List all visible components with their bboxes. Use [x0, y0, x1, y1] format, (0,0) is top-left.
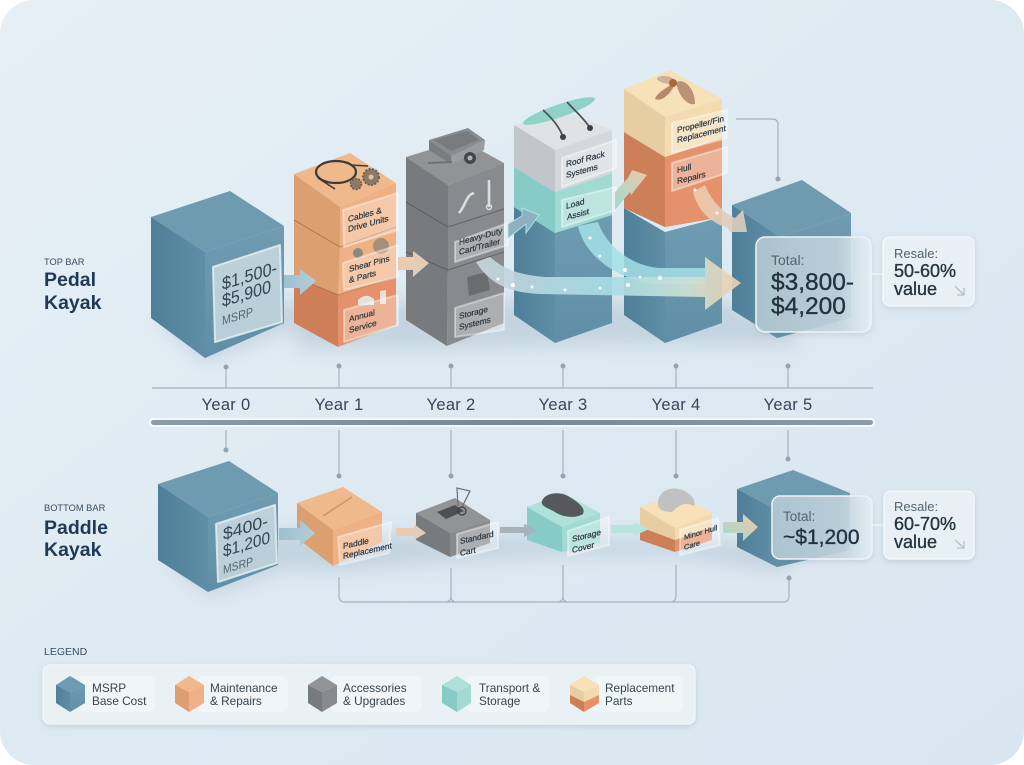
- legend item: maintenance and repairs: Maintenance: [210, 681, 278, 695]
- Year 1 pedal: maintenance stack: Shear Pins: [349, 253, 390, 274]
- legend item: accessories and upgrades: [308, 676, 422, 712]
- floor shadows: [155, 300, 810, 596]
- legend item: transport and storage: Transport &: [479, 681, 540, 695]
- row label: bottom bar Paddle Kayak: Kayak: [44, 539, 102, 561]
- callout: pedal total: $3,800-: [771, 269, 854, 296]
- Year 4 paddle: hull care cube: [640, 489, 720, 555]
- Year 1 paddle: replacement cube: Paddle: [343, 535, 369, 551]
- callout: pedal resale: [883, 237, 974, 306]
- Year 0 paddle: MSRP cube: $1,200: [223, 527, 270, 561]
- Year 4 pedal: replacement parts stack: Replacement: [677, 123, 726, 145]
- callout: paddle total: Total:: [783, 509, 815, 524]
- arrow: paddle year 3 to year 4: [611, 522, 649, 536]
- Year 3 paddle: storage cover cube: [527, 493, 609, 556]
- timeline axis: Year 2: [427, 396, 475, 414]
- Year 1 pedal: maintenance stack: Cables &: [348, 205, 382, 224]
- legend item: replacement parts: [570, 676, 683, 712]
- Year 0 paddle: MSRP cube: $400-: [223, 511, 268, 544]
- arrow: year 3 to year 4: [615, 170, 647, 210]
- callout: pedal total: [756, 237, 871, 332]
- callout: pedal resale: Resale:: [894, 246, 938, 261]
- legend item: MSRP base cost: [56, 676, 155, 712]
- callout: pedal total: Total:: [771, 252, 804, 268]
- row label: bottom bar Paddle Kayak: Paddle: [44, 517, 108, 539]
- Year 2 pedal: accessories stack: [406, 128, 508, 346]
- Year 3 pedal: transport stack: Systems: [566, 162, 598, 180]
- row label: top bar Pedal Kayak: TOP BAR: [44, 257, 85, 267]
- timeline axis: Year 0: [202, 396, 250, 414]
- connector: paddle total to resale: [872, 524, 884, 526]
- legend item: replacement parts: Parts: [605, 694, 633, 708]
- Year 2 pedal: accessories stack: Storage: [459, 304, 488, 321]
- callout: paddle resale: value: [894, 532, 937, 552]
- Year 3 paddle: storage cover cube: Storage: [572, 527, 601, 544]
- row label: top bar Pedal Kayak: Kayak: [44, 292, 102, 314]
- row label: bottom bar Paddle Kayak: [44, 503, 108, 561]
- Year 2 paddle: standard cart cube: [416, 488, 498, 558]
- Year 3 pedal: transport stack: Load: [566, 196, 585, 211]
- arrow: paddle year 0 to year 1: [279, 520, 315, 546]
- icon: propeller: [655, 76, 695, 104]
- callout: pedal resale: 50-60%: [894, 261, 956, 281]
- callout: paddle resale: Resale:: [894, 499, 938, 514]
- legend heading: LEGEND: [44, 646, 88, 658]
- arrow: paddle year 2 to year 3: [500, 524, 537, 537]
- Year 1 pedal: maintenance stack: Drive Units: [348, 213, 389, 234]
- Year 5 paddle: total cube: [737, 470, 850, 567]
- Year 0 paddle: MSRP cube: [158, 461, 278, 592]
- arrow: accumulated cost flow into total: [476, 188, 741, 310]
- callout: paddle total: [772, 496, 872, 559]
- Year 4 pedal: replacement parts stack: [624, 70, 727, 343]
- Year 0 pedal: MSRP cube: $1,500-: [222, 257, 277, 294]
- Year 4 paddle: hull care cube: Minor Hull: [684, 523, 718, 542]
- legend item: MSRP base cost: Base Cost: [92, 694, 147, 708]
- icon: hull patch: [658, 489, 694, 512]
- icon: storage cover: [542, 493, 584, 517]
- legend item: transport and storage: [442, 676, 549, 712]
- Year 1 pedal: maintenance stack: Service: [349, 318, 377, 335]
- arrow: year 2 to year 3: [508, 208, 539, 238]
- timeline axis: Year 5: [764, 396, 812, 414]
- Year 2 paddle: standard cart cube: Cart: [460, 545, 476, 558]
- Year 3 pedal: transport stack: Roof Rack: [566, 148, 605, 169]
- Year 1 pedal: maintenance stack: & Parts: [349, 268, 376, 285]
- Year 0 pedal: MSRP cube: [151, 191, 284, 358]
- callout: pedal resale: value: [894, 279, 937, 299]
- timeline axis: Year 4: [652, 396, 700, 414]
- arrow: year 0 to year 1: [284, 269, 316, 295]
- timeline axis: [149, 388, 875, 427]
- arrow: paddle year 4 to year 5: [723, 514, 758, 541]
- legend item: accessories and upgrades: & Upgrades: [343, 694, 405, 708]
- row label: bottom bar Paddle Kayak: BOTTOM BAR: [44, 503, 106, 513]
- Year 2 pedal: accessories stack: Cart/Trailer: [459, 236, 500, 257]
- icon: trailer and tools: [428, 128, 492, 296]
- timeline axis: Year 3: [539, 396, 587, 414]
- Year 4 pedal: replacement parts stack: Repairs: [677, 169, 706, 186]
- arrow: paddle year 1 to year 2: [396, 524, 426, 540]
- callout: paddle total: ~$1,200: [783, 526, 860, 549]
- Year 4 pedal: replacement parts stack: Propeller/Fin: [677, 113, 724, 135]
- icon: cart: [437, 488, 470, 519]
- panel: legend: [43, 665, 695, 724]
- Year 1 pedal: maintenance stack: Annual: [349, 307, 375, 324]
- legend item: accessories and upgrades: Accessories: [343, 681, 407, 695]
- row label: top bar Pedal Kayak: Pedal: [44, 269, 96, 291]
- icon: kayak on roof rack: [521, 92, 597, 140]
- legend item: replacement parts: Replacement: [605, 681, 675, 695]
- Year 1 pedal: maintenance stack: [294, 153, 398, 347]
- Year 4 pedal: replacement parts stack: Hull: [677, 162, 691, 175]
- Year 3 pedal: transport stack: [514, 92, 616, 343]
- icon: paddle: [323, 497, 352, 516]
- callout: paddle resale: 60-70%: [894, 514, 956, 534]
- Year 1 paddle: replacement cube: [297, 487, 392, 566]
- Year 3 pedal: transport stack: Assist: [567, 206, 590, 222]
- Year 2 pedal: accessories stack: Heavy-Duty: [459, 225, 503, 247]
- Year 3 paddle: storage cover cube: Cover: [572, 540, 594, 555]
- Year 2 paddle: standard cart cube: Standard: [460, 529, 494, 546]
- legend item: transport and storage: Storage: [479, 694, 521, 708]
- connector: total to resale: [871, 273, 883, 275]
- callout: paddle resale: [884, 491, 974, 559]
- Year 2 pedal: accessories stack: Systems: [459, 314, 491, 332]
- Year 4 paddle: hull care cube: Care: [684, 538, 700, 552]
- Year 5 pedal: total cube: [732, 180, 851, 338]
- legend item: maintenance and repairs: & Repairs: [210, 694, 262, 708]
- icon: cable and gears: [316, 161, 389, 305]
- Year 0 paddle: MSRP cube: MSRP: [223, 554, 253, 577]
- legend item: MSRP base cost: MSRP: [92, 681, 126, 695]
- timeline connectors: [224, 119, 792, 602]
- legend item: maintenance and repairs: [175, 676, 288, 712]
- arrow: year 1 to year 2: [398, 251, 429, 277]
- callout: pedal total: $4,200: [771, 293, 846, 320]
- Year 0 pedal: MSRP cube: MSRP: [222, 304, 253, 328]
- Year 1 paddle: replacement cube: Replacement: [343, 540, 392, 561]
- timeline axis: Year 1: [315, 396, 363, 414]
- arrow: year 4 to year 5: [693, 185, 747, 232]
- row label: top bar Pedal Kayak: [44, 257, 102, 314]
- Year 0 pedal: MSRP cube: $5,900: [222, 276, 271, 311]
